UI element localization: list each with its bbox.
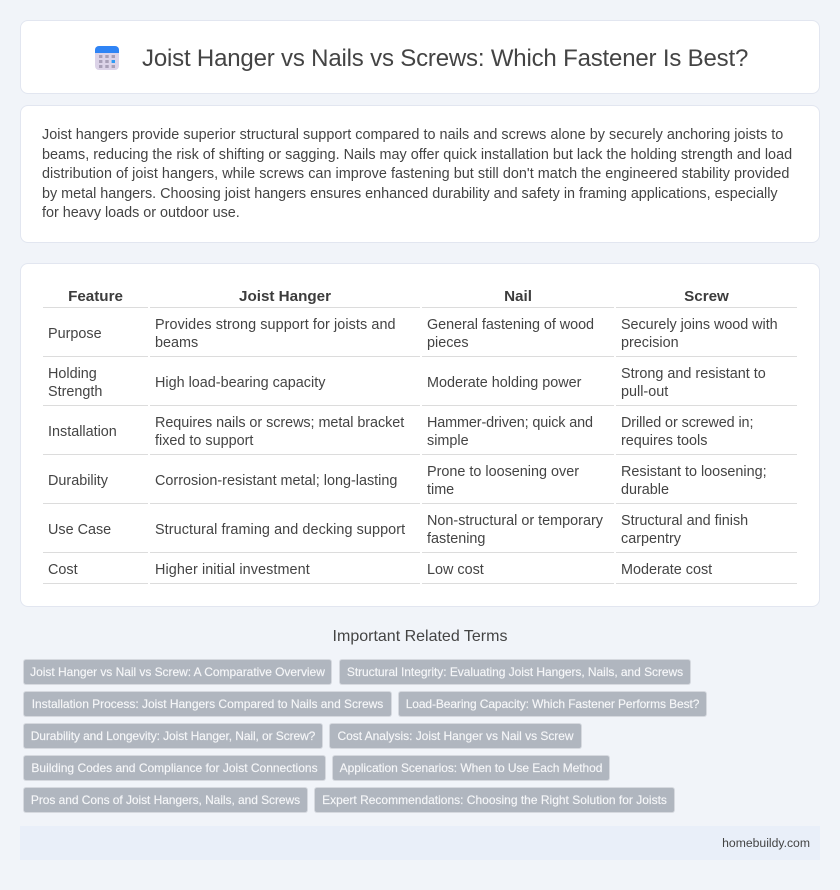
table header row: Feature <box>68 288 123 305</box>
row: Purpose: Securely joins wood with <box>621 317 778 333</box>
row: Cost <box>48 562 712 578</box>
row: Use Case: fastening <box>427 531 485 547</box>
footer <box>20 826 820 860</box>
row: Durability: durable <box>621 482 669 498</box>
intro card <box>20 105 820 243</box>
related terms tags: Installation Process: Joist Hangers Compared to Nails and Screws <box>32 697 383 711</box>
related terms heading: Important Related Terms <box>333 628 507 645</box>
related terms tags <box>23 659 707 813</box>
header card <box>20 20 820 94</box>
row: Purpose <box>48 317 778 351</box>
row: Installation: Installation <box>48 424 117 440</box>
intro text: by metal hangers. Choosing joist hangers ensures enhanced durability and safety in framing applications, especially <box>42 186 778 202</box>
row: Use Case <box>48 513 748 547</box>
row: Installation: Hammer-driven; quick and <box>427 415 593 431</box>
row: Holding Strength: Holding <box>48 366 97 382</box>
row: Holding Strength: pull-out <box>621 384 668 400</box>
row: Cost: Low cost <box>427 562 484 578</box>
row: Purpose: General fastening of wood <box>427 317 594 333</box>
intro text: Joist hangers provide superior structural support compared to nails and screws alone by securely anchoring joists to <box>42 127 783 143</box>
related terms tags: Load-Bearing Capacity: Which Fastener Performs Best? <box>406 697 699 711</box>
row: Durability: Prone to loosening over <box>427 464 579 480</box>
row: Cost: Cost <box>48 562 78 578</box>
row: Use Case: Structural and finish <box>621 513 748 529</box>
row: Purpose: Provides strong support for joists and <box>155 317 396 333</box>
icon: calendar <box>95 46 119 70</box>
table header row: Screw <box>684 288 729 305</box>
row: Holding Strength: Strong and resistant to <box>621 366 766 382</box>
intro text <box>42 127 792 221</box>
related terms tags: Building Codes and Compliance for Joist Connections <box>31 761 318 775</box>
row: Cost: Higher initial investment <box>155 562 310 578</box>
row: Holding Strength <box>48 366 766 400</box>
row: Holding Strength: Strength <box>48 384 102 400</box>
row: Use Case: Structural framing and decking support <box>155 522 405 538</box>
related terms tags: Structural Integrity: Evaluating Joist Hangers, Nails, and Screws <box>347 665 683 679</box>
row: Installation: Drilled or screwed in; <box>621 415 753 431</box>
row: Use Case: Non-structural or temporary <box>427 513 603 529</box>
row: Purpose: Purpose <box>48 326 102 342</box>
row: Holding Strength: High load-bearing capacity <box>155 375 325 391</box>
row: Durability <box>48 464 767 498</box>
table card <box>20 263 820 607</box>
row: Holding Strength: Moderate holding power <box>427 375 581 391</box>
footer site name: homebuildy.com <box>722 836 810 850</box>
related terms tags: Pros and Cons of Joist Hangers, Nails, and Screws <box>31 793 300 807</box>
row: Installation: fixed to support <box>155 433 253 449</box>
table header row <box>68 288 729 305</box>
related terms tags: Joist Hanger vs Nail vs Screw: A Comparative Overview <box>30 665 325 679</box>
intro text: beams, reducing the risk of shifting or sagging. Nails may offer quick installation but lack the holding strength and load <box>42 146 792 162</box>
row: Installation: simple <box>427 433 469 449</box>
row: Use Case: carpentry <box>621 531 681 547</box>
related terms tags: Durability and Longevity: Joist Hanger, Nail, or Screw? <box>31 729 315 743</box>
row: Durability: Resistant to loosening; <box>621 464 767 480</box>
related terms tags: Cost Analysis: Joist Hanger vs Nail vs Screw <box>337 729 574 743</box>
row: Durability: Corrosion-resistant metal; long-lasting <box>155 473 397 489</box>
row: Purpose: precision <box>621 335 679 351</box>
row: Use Case: Use Case <box>48 522 111 538</box>
intro text: distribution of joist hangers, while screws can improve fastening but still don't match the engineered stability provided <box>42 166 789 182</box>
comparison table <box>43 288 797 584</box>
table header row: Nail <box>504 288 532 305</box>
row: Purpose: pieces <box>427 335 469 351</box>
row: Cost: Moderate cost <box>621 562 712 578</box>
title: Joist Hanger vs Nails vs Screws: Which Fastener Is Best? <box>142 45 748 72</box>
row: Installation: Requires nails or screws; metal bracket <box>155 415 404 431</box>
related terms tags: Application Scenarios: When to Use Each Method <box>340 761 602 775</box>
related terms tags: Expert Recommendations: Choosing the Right Solution for Joists <box>322 793 667 807</box>
row: Installation <box>48 415 753 449</box>
row: Durability: time <box>427 482 454 498</box>
row: Purpose: beams <box>155 335 198 351</box>
table header row: Joist Hanger <box>239 288 331 305</box>
row: Installation: requires tools <box>621 433 707 449</box>
intro text: for heavy loads or outdoor use. <box>42 205 240 221</box>
row: Durability: Durability <box>48 473 108 489</box>
